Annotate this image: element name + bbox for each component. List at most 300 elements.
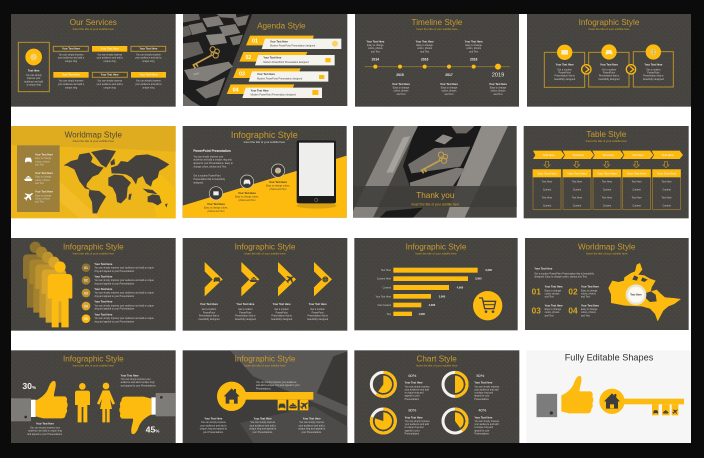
note top right: and appeal to your Presentations. [121,384,157,387]
numbered list: 05 [84,317,88,321]
table columns: Content [662,189,671,192]
text columns: You can simply impress [201,421,227,424]
heading: Thank you: Thank you [416,191,454,200]
box 3: PowerPoint [647,71,660,74]
box 1: Your Text Here [556,62,574,66]
slide: Worldmap Style yellow [11,126,176,218]
body text: You can simply impress your [193,156,224,159]
table columns: Your Text Here [537,171,557,175]
service grid: Your Text Here [62,47,81,51]
donut 80%: Presentations [405,433,420,436]
agenda item 01 [246,36,341,49]
callout circle: Text Here [630,293,642,297]
step circle 2: photos and Text [239,199,256,202]
left feature box: Text Here [28,68,40,72]
slide: Infographic Style people [11,238,176,331]
note above key: Presentations. [256,387,272,390]
chevron 2: PowerPoint [239,311,252,314]
transparent side panel: Easy to change [35,157,52,160]
numbered points [532,285,600,317]
agenda item 02: 02 [245,55,251,61]
icon: woman [97,383,115,422]
timeline notes: colors, photos [442,90,457,93]
map of Canada [608,263,681,321]
donut 60%: a unique zing and [405,391,424,394]
chevron 2: beautifully designed [235,318,257,321]
numbered list: You can simply impress your audience and add a unique [94,304,154,307]
intro text: designed. Easy to change colors, photos and Text. [534,276,588,279]
donut 80%: 80% [408,407,417,412]
callout circle [626,284,646,305]
donut 40%: Your Text Here [474,415,493,419]
heading: Worldmap Style [578,242,636,251]
bar chart: Content [383,286,391,289]
table columns: Text Here [602,180,613,183]
chevron 1: Your Text Here [200,302,219,306]
numbered list [82,262,154,323]
tablet [297,140,337,209]
step circle 3 [266,164,290,191]
donut 60%: 60% [408,373,417,378]
service grid: Your Text Here [101,47,119,51]
bar chart: 4,000 [457,285,464,289]
agenda item 04: Modern PowerPoint Presentation designed [251,94,296,97]
agenda item 02: Modern PowerPoint Presentation designed [263,61,309,64]
heading: Worldmap Style [65,131,123,140]
agenda item 02: Your Text Here [263,56,282,60]
bar chart: Text Here [381,269,392,272]
timeline axis: 2015 [396,73,404,77]
table columns: Content [632,204,641,207]
slide: Our Services [11,14,176,107]
subtitle: Insert the title of your subtitle here [244,364,286,368]
service grid: You can simply impress [97,53,123,56]
numbered list: You can simply impress your audience and add a unique [94,267,154,270]
heading: Agenda Style: Agenda Style [257,21,306,30]
note bottom left: Your Text Here [36,422,55,426]
body text: change colors, photos and Text. [193,165,227,168]
icon: shopping cart [473,291,502,320]
subtitle: Insert the title of your subtitle here [244,251,286,255]
chevron 4: Get a modern [310,308,326,311]
chevron 1: PowerPoint [203,311,215,314]
thumb shape [561,376,593,413]
intro text: Your Text Here [534,266,553,270]
agenda item 03: Your Text Here [257,72,276,76]
subtitle: Insert the title of your subtitle here [412,202,459,206]
chevron 4: Your Text Here [309,302,327,306]
transparent side panel: and Text [35,201,44,204]
agenda item 01: 01 [252,39,258,45]
table columns: Text Here [572,180,583,183]
left feature box: audience and add [24,80,44,83]
donut 40%: appeal to your [474,429,490,432]
note top right: audience and add a unique zing [121,381,155,384]
numbered points: Your Text Here [581,303,600,307]
numbered list: You can simply impress your audience and add a unique [94,279,154,282]
service grid: unique zing [104,86,116,89]
note bottom left: audience and add a unique zing [28,430,63,433]
numbered points: 04 [568,305,578,315]
box 2: Get a modern [602,68,617,71]
timeline notes: colors, photos [394,90,409,93]
chevron header row: Text Here [573,153,585,157]
agenda item 04 [227,84,322,98]
chevron 3: Your Text Here [273,302,291,306]
bar chart: 1,000 [418,312,425,316]
chevron header row: Text Here [632,153,644,157]
agenda item 03: Modern PowerPoint Presentation designed [257,77,303,80]
heading: Infographic Style [235,355,296,364]
transparent side panel: Easy to change [35,176,52,179]
text columns: unique zing and appeal to [200,428,228,431]
chevron 4: PowerPoint [312,311,324,314]
box 2: Your Text Here [600,62,619,66]
table columns: Content [543,189,551,192]
donut 40%: a unique zing and [474,426,494,429]
table columns: Text Here [632,180,642,183]
subtitle: Insert the title of your subtitle here [588,27,630,31]
bar chart [375,268,492,316]
step circle 2: Easy to change colors, [235,196,259,199]
donut 80%: your audience and add [405,423,430,426]
donut 50%: Your Text Here [474,381,493,385]
numbered points: and Text [581,296,590,299]
timeline notes: Easy to change [393,86,410,89]
golden key [193,47,219,68]
chevron 4: beautifully designed [307,318,329,321]
table columns: Your Text Here [657,171,677,175]
chevron 2: Get a modern [238,308,253,311]
chevron 3: Get a modern [274,308,290,311]
service grid: your audience and add a [58,57,85,60]
transparent side panel: Your Text Here [35,171,54,175]
subtitle: Insert the title of your subtitle here [73,27,115,31]
subtitle: Insert the title of your subtitle here [416,363,458,367]
service grid: You can simply impress [136,80,162,83]
slide: Timeline Style [355,14,519,107]
numbered points: colors, photos [545,311,560,314]
transparent side panel: Your Text Here [35,152,54,156]
donut 50%: Presentations [474,398,490,401]
heading: Infographic Style [235,242,296,251]
chevron header row: Text Here [543,153,555,157]
timeline axis: 2018 [470,57,478,61]
numbered points: Easy to change [545,289,562,292]
box 2 [589,44,629,87]
slide: Thank you [353,126,517,218]
donut 50%: 50% [476,373,485,378]
donut 40%: You can simply impress [474,420,500,423]
text columns: unique zing and appeal to [249,428,277,431]
heading: Timeline Style: Timeline Style [412,18,463,27]
chevron 1: Presentation that is [199,315,220,318]
bar chart: Your Content [377,304,391,307]
donut 60% [371,372,430,401]
box 1 [544,45,585,87]
step circle 3: photos and Text [270,188,287,191]
text columns: your Presentations. [252,431,273,434]
numbered list: zing and appeal to your Presentations [94,320,135,323]
timeline notes [366,39,508,96]
agenda item 03 [233,68,328,82]
slide: Infographic Style thumbs [11,350,176,443]
step circle 1 [204,187,228,213]
timeline notes: colors, photos [368,47,384,50]
left feature box [18,42,49,92]
numbered points: colors, photos [581,311,597,314]
translucent title band [353,186,517,207]
table columns: Text Here [602,196,613,199]
table columns: Content [632,189,641,192]
table columns: Text Here [662,180,672,183]
note above key [256,381,300,390]
service grid: your audience and add a [97,83,123,86]
note top right: Your Text Here [121,373,139,377]
table columns: Content [603,204,611,207]
text columns: You can simply impress [299,421,325,424]
timeline axis: 2019 [492,73,504,79]
service grid: your audience and add a [97,57,123,60]
background laptop photo [230,350,347,443]
subtitle: Insert the title of your subtitle here [244,140,286,144]
keyboard photo with diagonal bands [353,126,508,218]
step circle 1: Easy to change colors, [204,207,228,210]
bar chart: Text [387,313,391,316]
donut 40%: your audience and add [474,423,499,426]
text columns: unique zing and appeal to [298,428,326,431]
keyboard photo: Your [193,71,200,77]
slide: Table Style [524,126,689,218]
bar chart: 2,000 [429,303,436,307]
table columns: Text Here [632,196,642,199]
donut 80%: Your Text Here [405,415,423,419]
timeline notes: colors, photos [417,47,433,50]
slide: Infographic Style tablet [183,126,347,218]
box 1: PowerPoint [559,71,571,74]
donut 60%: your audience and add [405,388,430,391]
numbered list: 02 [84,279,88,283]
box 3: Get a modern [646,68,661,71]
heading: Table Style [586,130,627,139]
service grid: unique zing [142,86,155,89]
yellow diagonal area [183,156,347,218]
timeline notes: Your Text Here [489,82,508,86]
slide: Fully Editable Shapes [526,350,691,443]
numbered points: Easy to change [581,289,598,292]
donut 40%: 40% [478,407,487,412]
numbered list: zing and appeal to your Presentations [94,270,135,273]
table columns: Text Here [662,196,672,199]
timeline notes: Easy to change [490,86,507,89]
table columns: Content [573,204,581,207]
donut 40% [443,407,500,436]
chevron connector 2 [626,65,636,74]
timeline notes: Easy to change [465,44,483,47]
subtitle: Insert the title of your subtitle here [73,251,115,255]
agenda item 01: Your Text Here [270,39,289,43]
numbered list: Your Text Here [94,312,113,316]
heading: Infographic Style [63,355,124,364]
row of people silhouettes [23,242,72,327]
timeline axis: 2014 [372,57,379,61]
service grid [53,46,166,89]
box 3: Presentation that is [643,75,664,78]
chevron header row: Text Here [662,153,674,157]
timeline notes: Easy to change [416,44,434,47]
intro text: Get a modern PowerPoint Presentation that is beautifully [534,272,595,275]
table columns: Your Text Here [567,171,587,175]
numbered points: and Text [581,314,590,317]
service grid: unique zing [142,60,155,63]
timeline notes: Your Text Here [416,39,434,43]
numbered list: You can simply impress your audience and add a unique [94,317,154,320]
chevron header row: Text Here [603,153,615,157]
left feature box: You can simply [26,74,42,77]
text columns: You can simply impress [250,421,276,424]
text columns: Your Text Here [204,417,223,421]
agenda item 01: Modern PowerPoint Presentation designed [270,45,316,48]
table columns: Text Here [572,196,583,199]
donut 60%: Your Text Here [405,381,423,385]
text columns: your audience and add a [200,424,227,427]
box 2: beautifully designed [598,78,620,81]
chevron 4 [307,262,332,321]
numbered list: Your Text Here [94,300,113,304]
intro text [534,266,595,279]
service grid: Your Text Here [101,73,119,77]
service grid: Your Text Here [139,73,158,77]
agenda item 04: Your Text Here [251,88,269,92]
timeline notes: Your Text Here [465,39,483,43]
numbered points: and Text [545,314,554,317]
donut 60%: You can simply impress [405,385,430,388]
table columns [533,169,681,209]
timeline notes: and Text [371,50,380,53]
numbered points: 01 [532,287,541,297]
slide: Agenda Style [183,14,347,106]
transparent side panel: colors, photos [35,198,51,201]
stat: 45%: 45% [146,424,160,434]
text columns: Your Text Here [303,417,321,421]
heading: Chart Style [416,355,457,364]
slide: Worldmap Style Canada [525,238,689,330]
chevron 3 [271,262,296,321]
subtitle: Insert the title of your subtitle here [586,139,628,143]
text columns: your Presentations. [203,431,224,434]
donut 80% [371,407,430,436]
heading: Fully Editable Shapes [565,353,654,363]
chevron 1 [198,262,223,321]
donut 50%: appeal to your [474,395,490,398]
numbered points: Easy to change [581,308,598,311]
donut 50%: your audience and add [474,388,499,391]
agenda item 02 [239,52,335,65]
body text: Get a modern PowerPoint [193,175,221,178]
down arrows [544,161,669,168]
text columns: Your Text Here [254,417,272,421]
timeline notes: Easy to change [441,86,458,89]
timeline notes: and Text [494,93,503,96]
box 2: Presentation that is [599,75,620,78]
numbered list: Your Text Here [94,287,113,291]
chevron 1: Get a modern [202,308,217,311]
subtitle: Insert the title of your subtitle here [73,139,115,143]
transparent side panel: and Text [35,163,44,166]
thumbs up hand [11,381,68,421]
service grid: your audience and add a [135,83,162,86]
box 3: Your Text Here [644,62,663,66]
numbered points: colors, photos [545,292,560,295]
left feature box: impress your [27,77,41,80]
chevron 3: beautifully designed [271,318,293,321]
bar chart: Content Here [377,278,392,281]
box 3 [633,44,673,87]
bar chart: 5,000 [475,277,482,281]
donut 80%: a unique zing and [405,426,424,429]
stat: 30%: 30% [22,381,37,391]
timeline notes: colors, photos [466,47,482,50]
key graphic [217,382,313,411]
subtitle: Insert the title of your subtitle here [416,27,458,31]
service grid: unique zing [65,86,78,89]
step circle 3: Your Text Here [269,180,288,184]
timeline notes: and Text [420,50,429,53]
sleeve shape [536,394,557,417]
golden key [421,152,448,173]
step circle 1: Your Text Here [207,202,226,206]
text columns: your Presentations. [301,431,322,434]
slide: Infographic Style key [183,350,347,443]
bar chart: 3,000 [439,294,446,298]
numbered list: Your Text Here [94,262,113,266]
numbered points: and Text [545,296,554,299]
numbered list: Your Text Here [94,274,113,278]
numbered list: zing and appeal to your Presentations [94,282,135,285]
service grid: You can simply impress [97,80,123,83]
body text [193,149,233,184]
service grid: You can simply impress [59,80,84,83]
donut 40%: Presentations [474,433,490,436]
chevron 1: beautifully designed [198,318,220,321]
note bottom left: and appeal to your Presentations. [27,433,63,436]
service grid: your audience and add a [58,83,85,86]
transparent side panel: colors, photos [35,160,51,163]
heading: Infographic Style [63,242,124,251]
donut 50%: You can simply impress [474,385,500,388]
table columns: Your Text Here [627,171,647,175]
donut 50%: a unique zing and [474,391,494,394]
step circle 1: photos and Text [208,210,225,213]
box 1: beautifully designed [554,78,576,81]
note above key: You can simply impress your audience [256,381,297,384]
table columns: Text Here [542,196,553,199]
chevron header row [533,151,683,159]
heading: Infographic Style [579,18,640,27]
timeline axis: 2017 [445,73,453,77]
subtitle: Insert the title of your subtitle here [73,364,115,368]
table columns: Your Text Here [597,171,617,175]
service grid: Your Text Here [62,73,81,77]
service grid: unique zing [65,60,78,63]
service grid: You can simply impress [59,53,84,56]
numbered list: 01 [84,266,88,270]
step circle 2 [235,175,259,202]
donut 50% [443,372,500,401]
keyboard photo [183,14,252,106]
table columns: Text Here [542,180,553,183]
donut 80%: You can simply impress [405,420,430,423]
